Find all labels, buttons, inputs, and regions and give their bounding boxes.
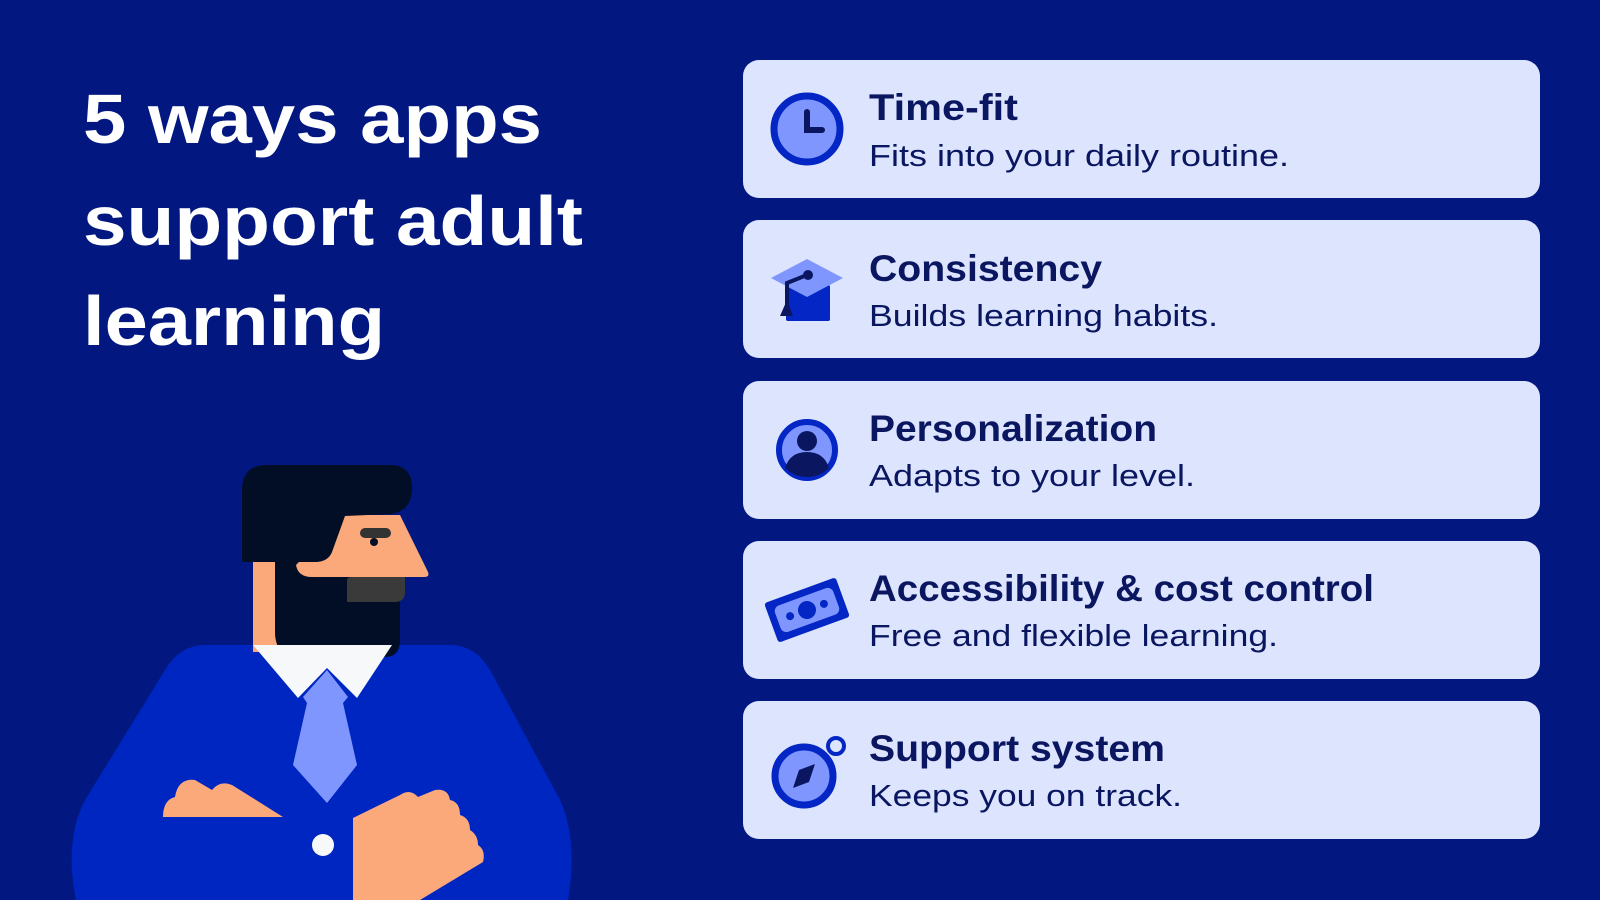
body bbox=[72, 645, 572, 900]
card: Time-fit: Fits into your daily routine. bbox=[869, 138, 1289, 173]
icon: compass bbox=[775, 738, 844, 805]
card: Consistency bbox=[743, 220, 1540, 358]
card: Time-fit bbox=[743, 60, 1540, 198]
icon: user bbox=[779, 422, 835, 478]
title: 5 ways apps bbox=[83, 80, 542, 158]
card: Personalization: Adapts to your level. bbox=[869, 458, 1195, 493]
icon: graduation cap bbox=[771, 259, 843, 321]
icon: money bill bbox=[764, 577, 850, 643]
card: Support system: Support system bbox=[869, 728, 1165, 769]
card: Support system: Keeps you on track. bbox=[869, 778, 1182, 813]
card: Accessibility bbox=[743, 541, 1540, 679]
card: Accessibility: Free and flexible learning. bbox=[869, 618, 1278, 653]
icon: clock bbox=[774, 96, 840, 162]
title: learning bbox=[83, 282, 385, 360]
card: Personalization bbox=[743, 381, 1540, 519]
card: Support system bbox=[743, 701, 1540, 839]
card: Consistency: Builds learning habits. bbox=[869, 298, 1218, 333]
illustration: man with crossed arms bbox=[72, 465, 572, 900]
card: Time-fit: Time-fit bbox=[869, 87, 1018, 128]
card: Accessibility: Accessibility & cost control bbox=[869, 568, 1374, 609]
card: Personalization: Personalization bbox=[869, 408, 1157, 449]
title bbox=[83, 80, 583, 360]
title: support adult bbox=[83, 182, 583, 260]
card: Consistency: Consistency bbox=[869, 248, 1102, 289]
